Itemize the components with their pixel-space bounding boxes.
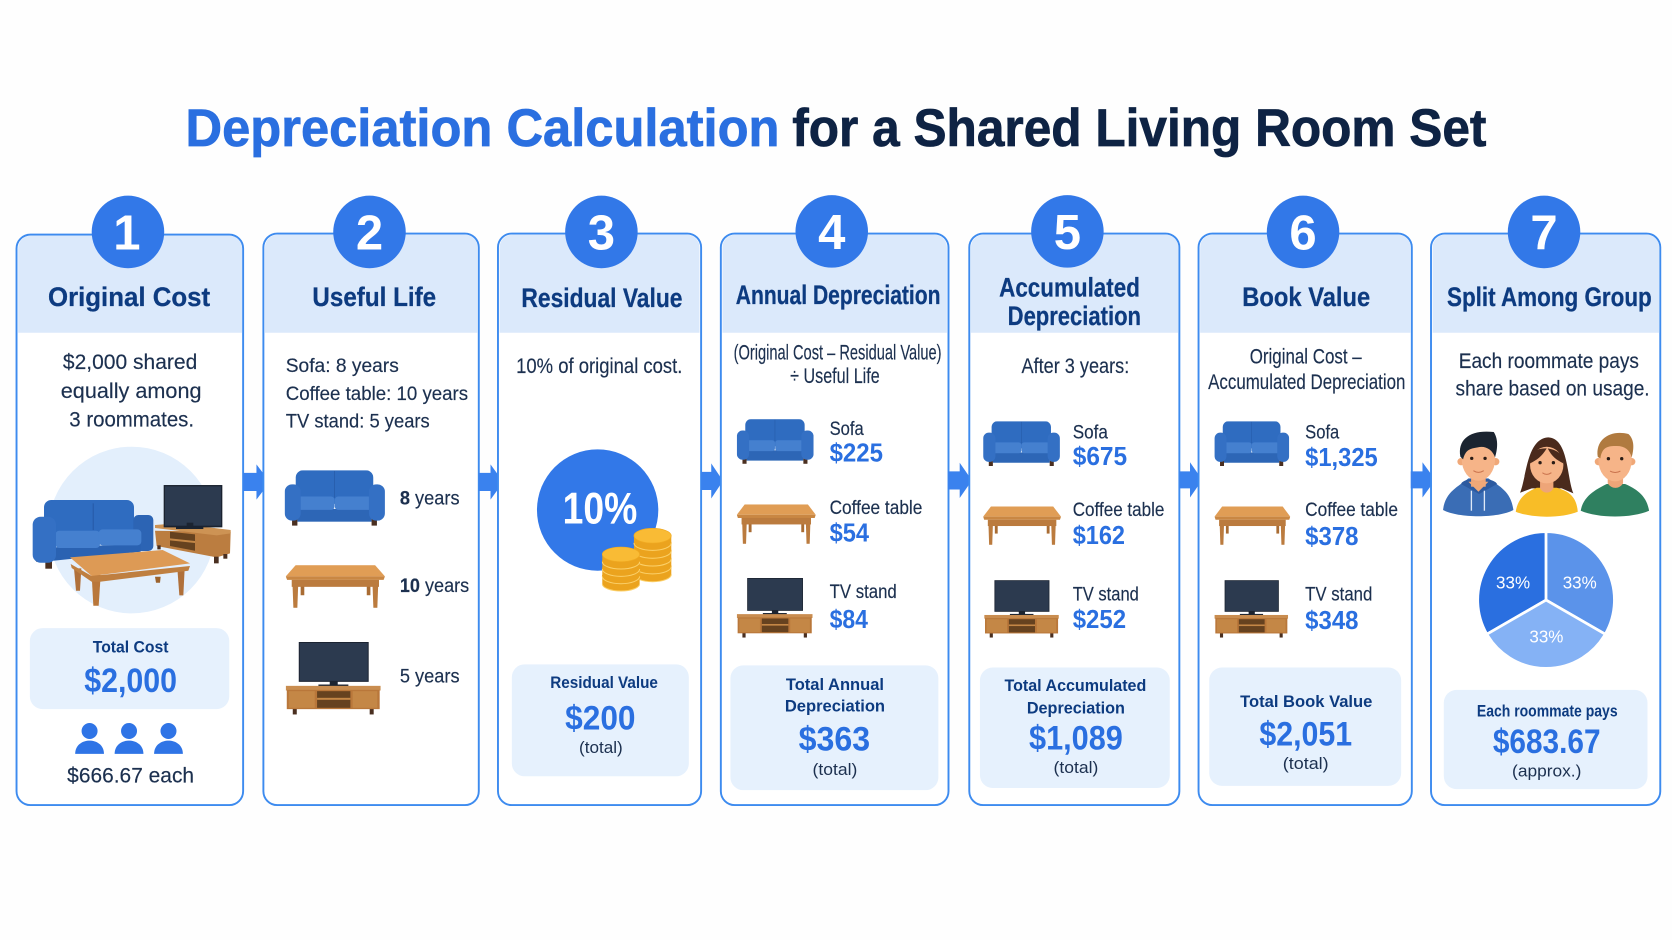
description: 3 roommates. xyxy=(69,408,194,432)
illustration: three roommates and pie chart xyxy=(1443,432,1649,668)
number badge 5: 5 xyxy=(1054,206,1081,260)
useful life list: Sofa: 8 years xyxy=(286,356,399,377)
panel: step 7 split among group xyxy=(1431,196,1660,805)
number badge 7 xyxy=(1508,196,1580,268)
roommate one xyxy=(1443,432,1513,516)
number badge 7: 7 xyxy=(1530,207,1558,261)
number badge 6 xyxy=(1267,196,1339,268)
row: coffee table xyxy=(1215,500,1398,551)
arrow 2 to 3 xyxy=(479,464,503,500)
icon row: tv stand 5 years: 5 years xyxy=(400,666,460,687)
formula xyxy=(734,340,942,388)
residual value box: (total) xyxy=(579,738,623,757)
row: tv stand: $348 xyxy=(1305,607,1358,635)
number badge 4: 4 xyxy=(818,206,846,260)
row: sofa: Sofa xyxy=(1305,422,1340,443)
row: sofa: Sofa xyxy=(830,419,864,440)
row: sofa xyxy=(983,421,1127,471)
total annual depreciation box: $363 xyxy=(799,721,870,759)
heading: original cost: Original Cost xyxy=(48,282,210,312)
each roommate pays box: (approx.) xyxy=(1512,761,1581,780)
number badge 3: 3 xyxy=(588,207,615,261)
formula: Original Cost – xyxy=(1250,345,1362,369)
arrow 1 to 2 xyxy=(243,464,270,500)
useful life list: Coffee table: 10 years xyxy=(286,384,468,405)
header band 6 xyxy=(1200,235,1411,333)
formula: ÷ Useful Life xyxy=(790,364,880,388)
header band 3 xyxy=(500,235,700,333)
title: for a Shared Living Room Set xyxy=(792,99,1487,158)
residual value box: Residual Value xyxy=(550,673,658,692)
number badge 4 xyxy=(795,195,868,268)
heading: annual depreciation: Annual Depreciation xyxy=(736,280,940,310)
number badge 3 xyxy=(565,196,638,268)
row: sofa xyxy=(1215,421,1378,472)
formula: Accumulated Depreciation xyxy=(1208,370,1405,394)
illustration: living room set xyxy=(33,447,231,613)
number badge 5 xyxy=(1031,195,1104,268)
total accumulated depreciation box xyxy=(980,668,1170,788)
description xyxy=(61,350,202,432)
residual value box xyxy=(512,664,689,776)
header band 7 xyxy=(1433,235,1659,333)
header band 1 xyxy=(18,236,242,333)
useful life list xyxy=(286,356,468,433)
pie labels: 33% xyxy=(1563,572,1597,592)
row: tv stand: TV stand xyxy=(1073,584,1139,605)
each roommate pays box: $683.67 xyxy=(1493,723,1601,761)
title xyxy=(186,99,1487,158)
panel: step 4 annual depreciation xyxy=(721,195,948,805)
pie chart xyxy=(1478,532,1614,668)
description: 10% of original cost. xyxy=(516,354,682,378)
total accumulated depreciation box: Total Accumulated xyxy=(1004,676,1146,695)
icon: ten percent with coins: 10% xyxy=(563,484,637,533)
row: coffee table: Coffee table xyxy=(1305,500,1398,521)
total book value box xyxy=(1209,668,1401,786)
total accumulated depreciation box: $1,089 xyxy=(1029,720,1123,758)
icon row: sofa 8 years: 8 years xyxy=(400,488,460,509)
panel: step 3 residual value xyxy=(498,196,701,805)
row: coffee table: $378 xyxy=(1305,523,1358,551)
row: sofa: Sofa xyxy=(1073,422,1108,443)
row: coffee table xyxy=(737,498,922,548)
row: sofa xyxy=(737,419,883,468)
arrow 4 to 5 xyxy=(948,463,972,498)
roommate two xyxy=(1516,437,1578,517)
panel: step 5 accumulated depreciation xyxy=(969,195,1179,805)
description: equally among xyxy=(61,379,202,403)
each roommate pays box xyxy=(1444,690,1647,789)
row: sofa: $1,325 xyxy=(1305,444,1378,472)
pie labels: 33% xyxy=(1529,627,1563,647)
row: tv stand xyxy=(737,578,897,638)
each roommate pays box: Each roommate pays xyxy=(1477,702,1618,721)
header band 5 xyxy=(971,235,1178,333)
icon row: table 10 years: 10 years xyxy=(400,576,469,597)
icon: three roommates xyxy=(75,723,183,754)
row: coffee table: $54 xyxy=(830,520,870,548)
icon row: sofa 8 years xyxy=(285,470,460,526)
header band 4 xyxy=(722,235,947,333)
heading: accumulated depreciation: Depreciation xyxy=(1008,301,1141,331)
pie labels xyxy=(1496,572,1597,647)
roommate three xyxy=(1581,433,1649,516)
number badge 1: 1 xyxy=(113,207,141,261)
residual value box: $200 xyxy=(565,699,636,737)
description xyxy=(1456,349,1650,401)
row: sofa: $225 xyxy=(830,440,883,468)
row: coffee table xyxy=(983,500,1164,550)
row: sofa: $675 xyxy=(1073,443,1127,471)
total annual depreciation box xyxy=(730,665,938,790)
total book value box: $2,051 xyxy=(1259,715,1352,753)
total accumulated depreciation box: Depreciation xyxy=(1027,698,1125,717)
icon row: table 10 years xyxy=(286,565,469,608)
total book value box: Total Book Value xyxy=(1240,692,1372,711)
per person amount: $666.67 each xyxy=(67,764,194,788)
description: After 3 years: xyxy=(1022,354,1129,378)
heading: useful life: Useful Life xyxy=(312,282,436,312)
panel: step 2 useful life xyxy=(263,196,479,805)
total cost box: $2,000 xyxy=(84,662,177,700)
total annual depreciation box: Total Annual xyxy=(786,675,884,694)
description: $2,000 shared xyxy=(63,350,197,374)
arrow 3 to 4 xyxy=(701,463,723,499)
description: Each roommate pays xyxy=(1459,349,1639,373)
row: tv stand: TV stand xyxy=(1305,584,1372,605)
row: tv stand xyxy=(984,580,1139,638)
row: tv stand xyxy=(1215,580,1372,638)
heading: accumulated depreciation: Accumulated xyxy=(999,272,1140,302)
total annual depreciation box: (total) xyxy=(813,760,857,779)
number badge 2 xyxy=(333,196,406,268)
arrow 5 to 6 xyxy=(1179,462,1202,497)
row: tv stand: $84 xyxy=(830,606,869,634)
title: Depreciation Calculation xyxy=(186,99,779,158)
row: tv stand: TV stand xyxy=(830,582,897,603)
arrow 6 to 7 xyxy=(1411,462,1435,497)
heading: accumulated depreciation xyxy=(999,272,1141,331)
total accumulated depreciation box: (total) xyxy=(1054,758,1098,777)
heading: residual value: Residual Value xyxy=(521,283,682,313)
icon: ten percent with coins xyxy=(537,449,671,591)
header band 2 xyxy=(265,235,478,333)
useful life list: TV stand: 5 years xyxy=(286,412,430,433)
row: coffee table: $162 xyxy=(1073,522,1125,550)
total book value box: (total) xyxy=(1283,754,1329,773)
total cost box xyxy=(30,628,229,709)
number badge 6: 6 xyxy=(1289,207,1317,261)
row: tv stand: $252 xyxy=(1073,606,1126,634)
number badge 1 xyxy=(92,196,164,268)
panel: step 1 original cost xyxy=(17,196,243,805)
icon row: tv stand 5 years xyxy=(286,642,460,714)
pie labels: 33% xyxy=(1496,572,1530,592)
formula: (Original Cost – Residual Value) xyxy=(734,340,942,364)
heading: book value: Book Value xyxy=(1242,282,1370,312)
total annual depreciation box: Depreciation xyxy=(785,696,885,715)
formula xyxy=(1208,345,1405,394)
description: share based on usage. xyxy=(1456,377,1650,401)
panel: step 6 book value xyxy=(1199,196,1412,805)
number badge 2: 2 xyxy=(356,207,383,261)
total cost box: Total Cost xyxy=(93,638,169,657)
row: coffee table: Coffee table xyxy=(1073,500,1164,521)
row: coffee table: Coffee table xyxy=(830,498,922,519)
